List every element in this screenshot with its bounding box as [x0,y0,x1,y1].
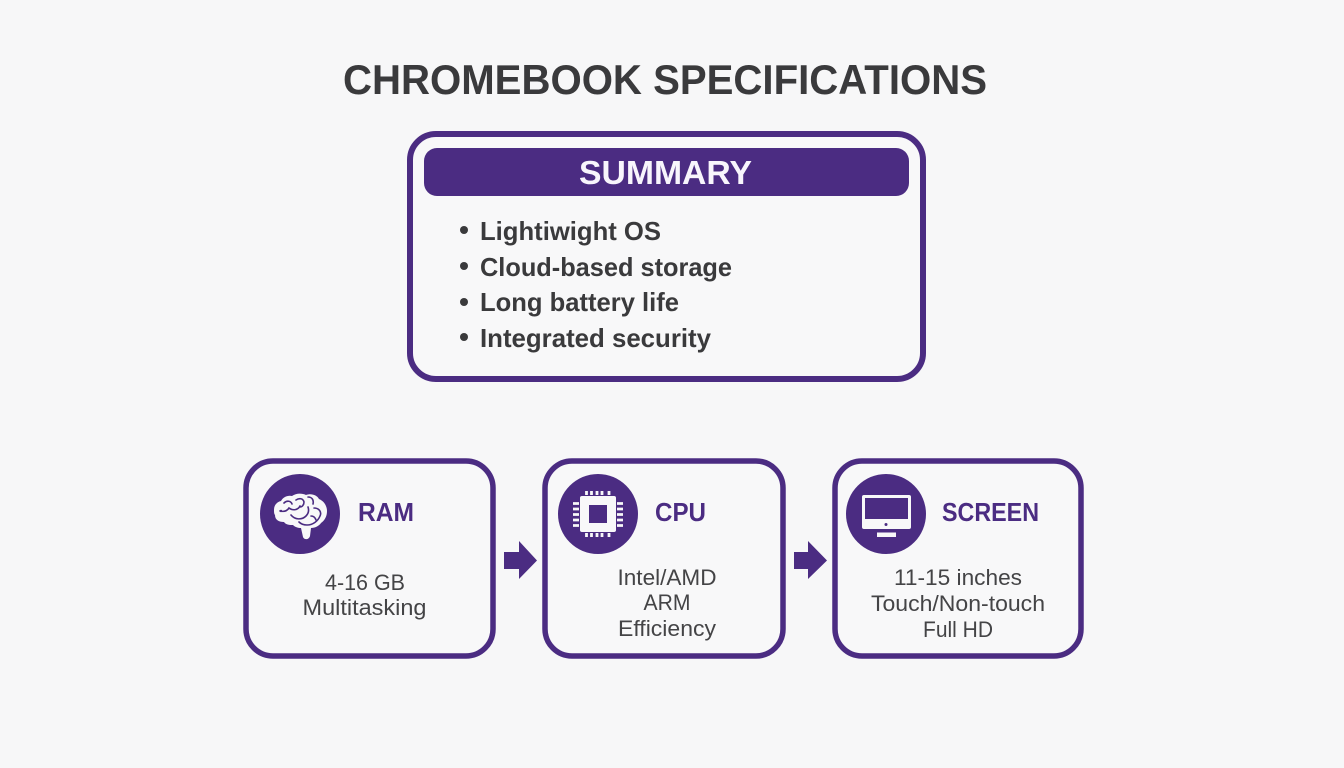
screen details: 11-15 inches [894,565,1022,590]
icon: monitor [846,474,926,554]
CPU details: Intel/AMD [618,565,716,590]
panel: screen [835,461,1081,656]
icon: brain [260,474,340,554]
CPU heading: CPU [655,497,706,527]
arrow: CPU to screen [794,541,827,579]
CPU details: Efficiency [618,616,717,641]
screen details: Full HD [923,617,993,642]
summary bullet list: Cloud-based storage [480,252,732,282]
panel: RAM [246,461,493,656]
summary heading: SUMMARY [579,154,752,191]
RAM details [302,570,426,620]
summary bullet list: Integrated security [480,323,712,353]
title: CHROMEBOOK SPECIFICATIONS [343,56,987,103]
icon: processor chip [558,474,638,554]
summary bullet list: Long battery life [480,287,679,317]
summary header bar [424,148,909,196]
RAM details: 4-16 GB [325,570,405,595]
screen details [871,565,1045,642]
summary bullet list: Lightiwight OS [480,216,661,246]
summary bullet list [460,216,732,353]
RAM heading: RAM [358,497,414,527]
screen heading: SCREEN [942,497,1039,527]
CPU details: ARM [644,590,690,615]
RAM details: Multitasking [302,595,426,620]
arrow: RAM to CPU [504,541,537,579]
CPU details [618,565,717,641]
panel: CPU [545,461,783,656]
screen details: Touch/Non-touch [871,591,1045,616]
panel: summary [410,134,923,379]
